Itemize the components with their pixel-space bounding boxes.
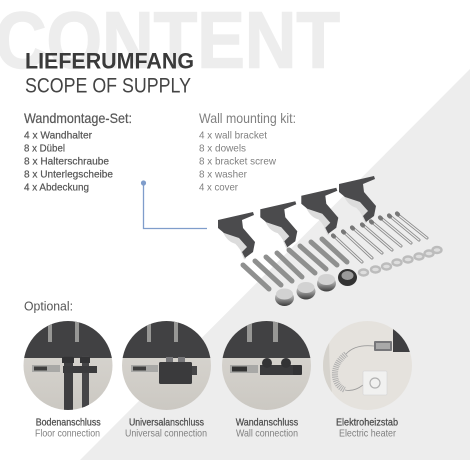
caption: wall connection: Wall connection xyxy=(236,428,298,440)
caption: wall connection: Wandanschluss xyxy=(236,417,298,429)
photo: universal connection xyxy=(122,321,212,411)
text block: English kit list: 8 x washer xyxy=(199,168,247,180)
photo: electric heater xyxy=(323,321,413,411)
text block: English kit list: 8 x dowels xyxy=(199,142,246,154)
text block: German kit list: 4 x Abdeckung xyxy=(24,182,89,194)
text block: German kit list: 8 x Dübel xyxy=(24,142,65,154)
subtitle: scope of supply: SCOPE OF SUPPLY xyxy=(25,74,191,98)
illustration: eight washers xyxy=(359,247,442,276)
caption: electric heater: Elektroheizstab xyxy=(336,417,398,429)
illustration: four wall brackets xyxy=(218,176,376,259)
text block: English kit list: 4 x wall bracket xyxy=(199,130,267,142)
text block: English kit list xyxy=(199,110,296,194)
text block: English kit list: Wall mounting kit: xyxy=(199,110,296,126)
illustration: eight dowels xyxy=(243,239,347,289)
caption: wall connection xyxy=(236,417,298,440)
text block: German kit list xyxy=(24,110,132,194)
caption: universal connection: Universalanschluss xyxy=(129,417,204,429)
callout line xyxy=(141,180,207,228)
caption: electric heater xyxy=(336,417,398,440)
photo: floor connection xyxy=(23,321,113,411)
caption: electric heater: Electric heater xyxy=(339,428,396,440)
caption: universal connection: Universal connection xyxy=(125,428,207,440)
heading: Optional: Optional: xyxy=(24,298,73,314)
illustration: four chrome covers xyxy=(275,269,357,306)
text block: English kit list: 8 x bracket screw xyxy=(199,156,276,168)
text block: German kit list: 8 x Unterlegscheibe xyxy=(24,168,113,180)
background diagonal panel xyxy=(80,69,470,460)
illustration: eight screws xyxy=(333,214,427,262)
caption: floor connection xyxy=(35,417,101,440)
title: Lieferumfang: LIEFERUMFANG xyxy=(25,48,194,74)
photo: wall connection xyxy=(222,321,312,411)
text block: German kit list: Wandmontage-Set: xyxy=(24,110,132,126)
caption: floor connection: Bodenanschluss xyxy=(36,417,101,429)
text block: German kit list: 4 x Wandhalter xyxy=(24,130,92,142)
text block: English kit list: 4 x cover xyxy=(199,182,238,194)
caption: floor connection: Floor connection xyxy=(35,428,100,440)
caption: universal connection xyxy=(125,417,207,440)
text block: German kit list: 8 x Halterschraube xyxy=(24,156,109,168)
